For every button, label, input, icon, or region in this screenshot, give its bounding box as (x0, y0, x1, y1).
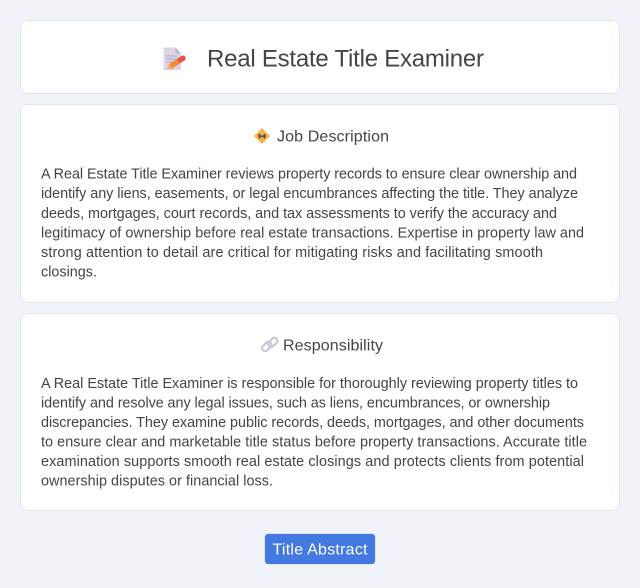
job description text (41, 167, 584, 280)
job description text: closings. (41, 264, 97, 280)
responsibility text: ownership disputes or financial loss. (41, 474, 273, 490)
job description text: legitimacy of ownership before real estate transactions. Expertise in property law and (41, 225, 584, 241)
button: title abstract (265, 534, 375, 564)
responsibility text (41, 376, 587, 490)
title: Real Estate Title Examiner (207, 46, 484, 72)
responsibility text: to ensure clear and marketable title status before property transactions. Accurate title (41, 434, 587, 450)
responsibility text: A Real Estate Title Examiner is responsible for thoroughly reviewing property titles to (41, 376, 578, 392)
job description text: strong attention to detail are critical for mitigating risks and facilitating smooth (41, 245, 543, 261)
responsibility text: discrepancies. They examine public records, deeds, mortgages, and other documents (41, 415, 584, 431)
icon: chain link (261, 336, 278, 352)
button: title abstract: Title Abstract (272, 542, 368, 558)
job description text: deeds, mortgages, court records, and tax assessments to verify the accuracy and (41, 206, 557, 222)
heading: job description: Job Description (277, 128, 389, 146)
panel: responsibility (20, 313, 620, 511)
icon: document with pencil (164, 48, 186, 70)
job description text: A Real Estate Title Examiner reviews property records to ensure clear ownership and (41, 167, 577, 183)
job description text: identify any liens, easements, or legal encumbrances affecting the title. They analyze (41, 186, 578, 202)
responsibility text: identify and resolve any legal issues, such as liens, encumbrances, or ownership (41, 396, 550, 412)
responsibility text: examination supports smooth real estate closings and protects clients from potential (41, 454, 584, 470)
panel: title card (20, 20, 620, 94)
panel: job description (20, 104, 620, 303)
heading: responsibility: Responsibility (283, 338, 383, 354)
icon: diamond sign (254, 128, 270, 144)
